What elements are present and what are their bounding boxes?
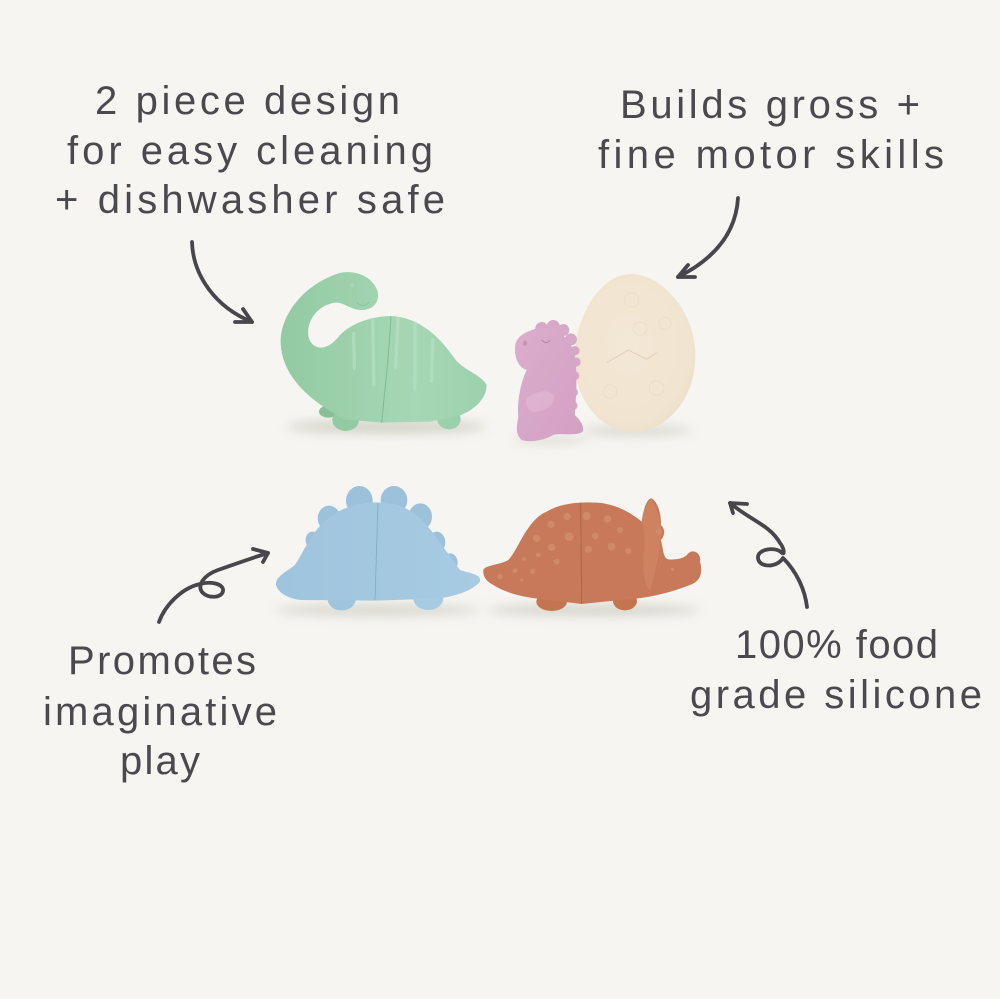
arrow: to egg bbox=[678, 198, 738, 277]
callout: food grade silicone: 100% food bbox=[735, 623, 938, 667]
arrow: to green dinosaur bbox=[192, 242, 252, 322]
callout: imaginative play: play bbox=[120, 739, 200, 783]
callout: 2 piece design: for easy cleaning bbox=[67, 129, 433, 173]
callout: 2 piece design bbox=[55, 79, 445, 222]
feet bbox=[328, 588, 356, 610]
callout: 2 piece design: 2 piece design bbox=[95, 79, 400, 123]
callout: food grade silicone: grade silicone bbox=[690, 673, 982, 717]
toy: orange dinosaur bbox=[483, 498, 701, 616]
callout: motor skills: fine motor skills bbox=[598, 133, 944, 177]
toy: green dinosaur bbox=[281, 272, 487, 434]
callout: imaginative play bbox=[43, 639, 277, 783]
arrow: to orange dinosaur bbox=[730, 503, 807, 607]
feet bbox=[536, 592, 567, 611]
arrow: to blue dinosaur bbox=[159, 549, 268, 622]
callout: motor skills: Builds gross + bbox=[620, 83, 920, 127]
callout: 2 piece design: + dishwasher safe bbox=[55, 178, 445, 222]
callout: imaginative play: imaginative bbox=[43, 690, 277, 734]
callout: imaginative play: Promotes bbox=[68, 639, 256, 683]
toy: blue dinosaur bbox=[273, 486, 480, 616]
toy: egg bbox=[574, 274, 695, 436]
callout: motor skills bbox=[598, 83, 944, 177]
toy: pink dinosaur bbox=[512, 320, 588, 443]
plate ridges bbox=[354, 318, 433, 390]
callout: food grade silicone bbox=[690, 623, 982, 717]
back spikes bbox=[306, 486, 458, 572]
